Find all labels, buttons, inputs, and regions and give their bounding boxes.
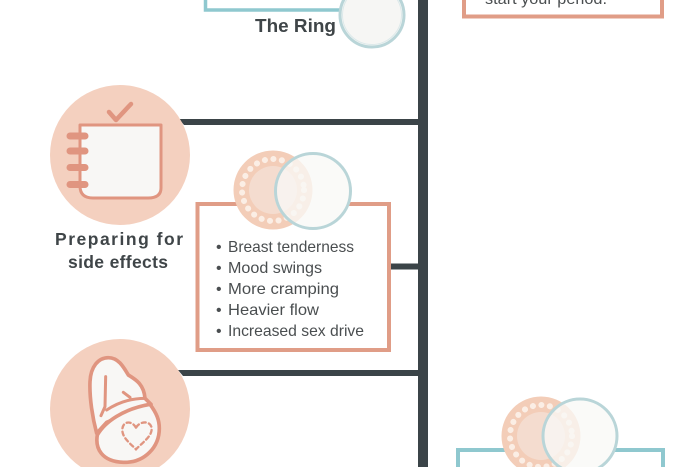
list: side effects: • <box>216 302 222 319</box>
heading: preparing for side effects: Preparing for <box>55 229 183 249</box>
list: side effects: Breast tenderness <box>228 239 354 256</box>
list: side effects: • <box>216 323 222 340</box>
list: side effects <box>216 239 364 340</box>
icon: the ring <box>340 0 404 47</box>
list: side effects: More cramping <box>228 281 339 298</box>
icon: arm lines <box>101 377 145 416</box>
icon: check mark <box>109 104 131 120</box>
list: side effects: Increased sex drive <box>228 323 364 340</box>
list: side effects: • <box>216 239 222 256</box>
list: side effects: • <box>216 260 222 277</box>
connector: pregnancy to timeline <box>178 370 418 376</box>
heading: preparing for side effects <box>55 229 183 272</box>
panel: side effects box <box>198 204 389 350</box>
list: side effects: Mood swings <box>228 260 322 277</box>
icon: notebook circle <box>50 85 190 225</box>
icon: notebook page <box>80 125 161 198</box>
icon: pill pack and ring <box>234 150 352 230</box>
heading: preparing for side effects: side effects <box>68 252 168 272</box>
timeline: vertical bar <box>418 0 428 467</box>
icon: pregnancy circle <box>50 339 190 467</box>
heading: the ring: The Ring <box>255 15 336 36</box>
panel: start your period box <box>464 0 662 16</box>
list: side effects: • <box>216 281 222 298</box>
icon: bottom pill pack and ring <box>502 396 618 467</box>
connector: notebook to timeline <box>179 119 418 125</box>
icon: pregnant belly <box>97 404 159 462</box>
icon: dashed heart <box>122 422 152 449</box>
icon: pregnant body upper <box>90 358 151 433</box>
panel: bottom right box <box>458 450 663 467</box>
list: side effects: Heavier flow <box>228 302 319 319</box>
icon: notebook rings <box>66 132 88 188</box>
connector: side effects box to timeline <box>391 264 418 270</box>
panel: the ring box <box>206 0 376 10</box>
